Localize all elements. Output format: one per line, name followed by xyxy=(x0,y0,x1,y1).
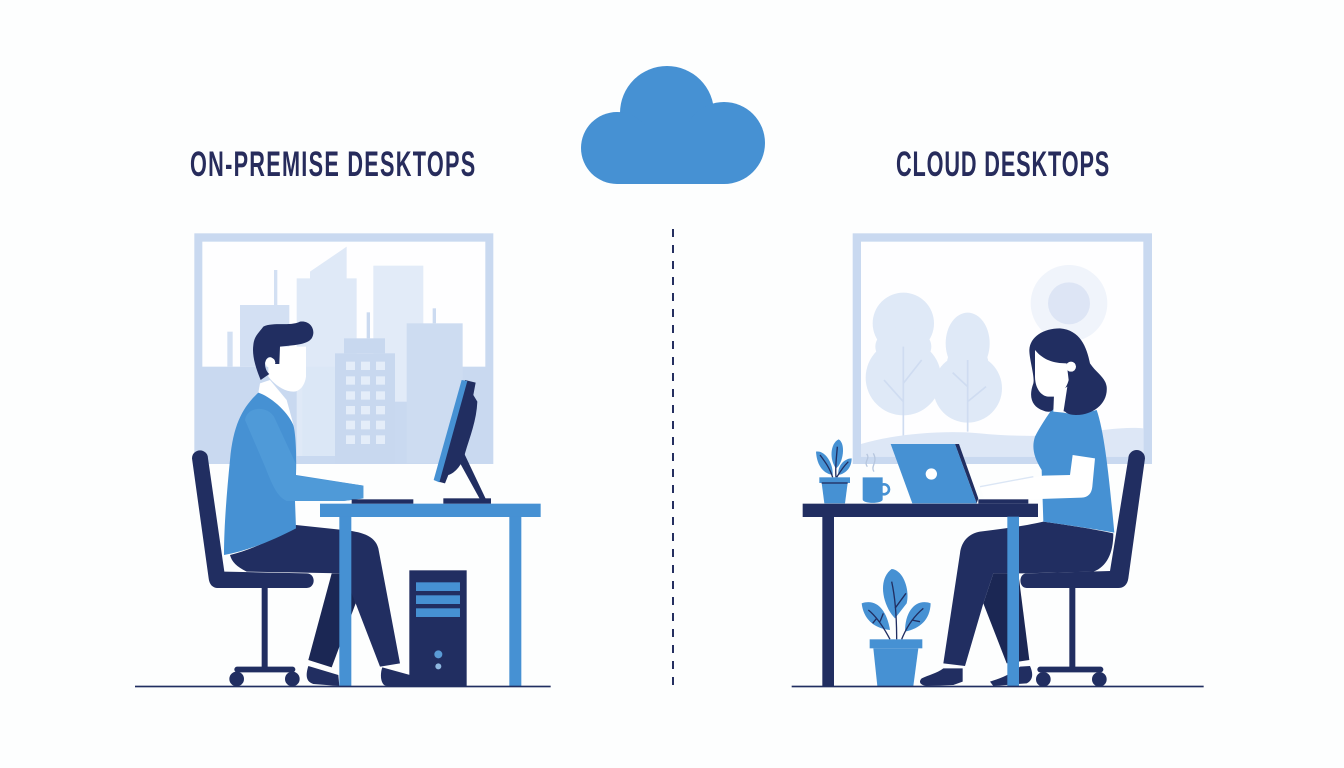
office chair xyxy=(1020,450,1145,687)
heading: on-premise desktops: ON-PREMISE DESKTOPS xyxy=(190,146,475,184)
panel: cloud desktop scene xyxy=(792,233,1204,687)
window with trees and sun xyxy=(853,233,1152,464)
keyboard xyxy=(352,499,413,504)
icon: small potted plant xyxy=(816,439,852,503)
floor line xyxy=(792,686,1204,687)
dashed divider xyxy=(672,229,674,688)
office chair xyxy=(192,450,314,686)
desk xyxy=(803,504,1038,687)
heading: cloud desktops: CLOUD DESKTOPS xyxy=(896,146,1109,184)
window with city skyline xyxy=(194,233,493,464)
panel: on-premise desktop scene xyxy=(135,233,551,687)
floor line xyxy=(135,686,551,687)
desktop tower xyxy=(409,570,467,687)
laptop xyxy=(891,444,1028,504)
monitor xyxy=(434,380,491,504)
icon: cloud xyxy=(581,66,765,184)
man at desk xyxy=(224,321,410,686)
woman at desk xyxy=(920,328,1114,686)
icon: coffee cup with steam xyxy=(863,453,889,503)
icon: large potted plant xyxy=(862,569,931,686)
desk xyxy=(320,504,541,687)
